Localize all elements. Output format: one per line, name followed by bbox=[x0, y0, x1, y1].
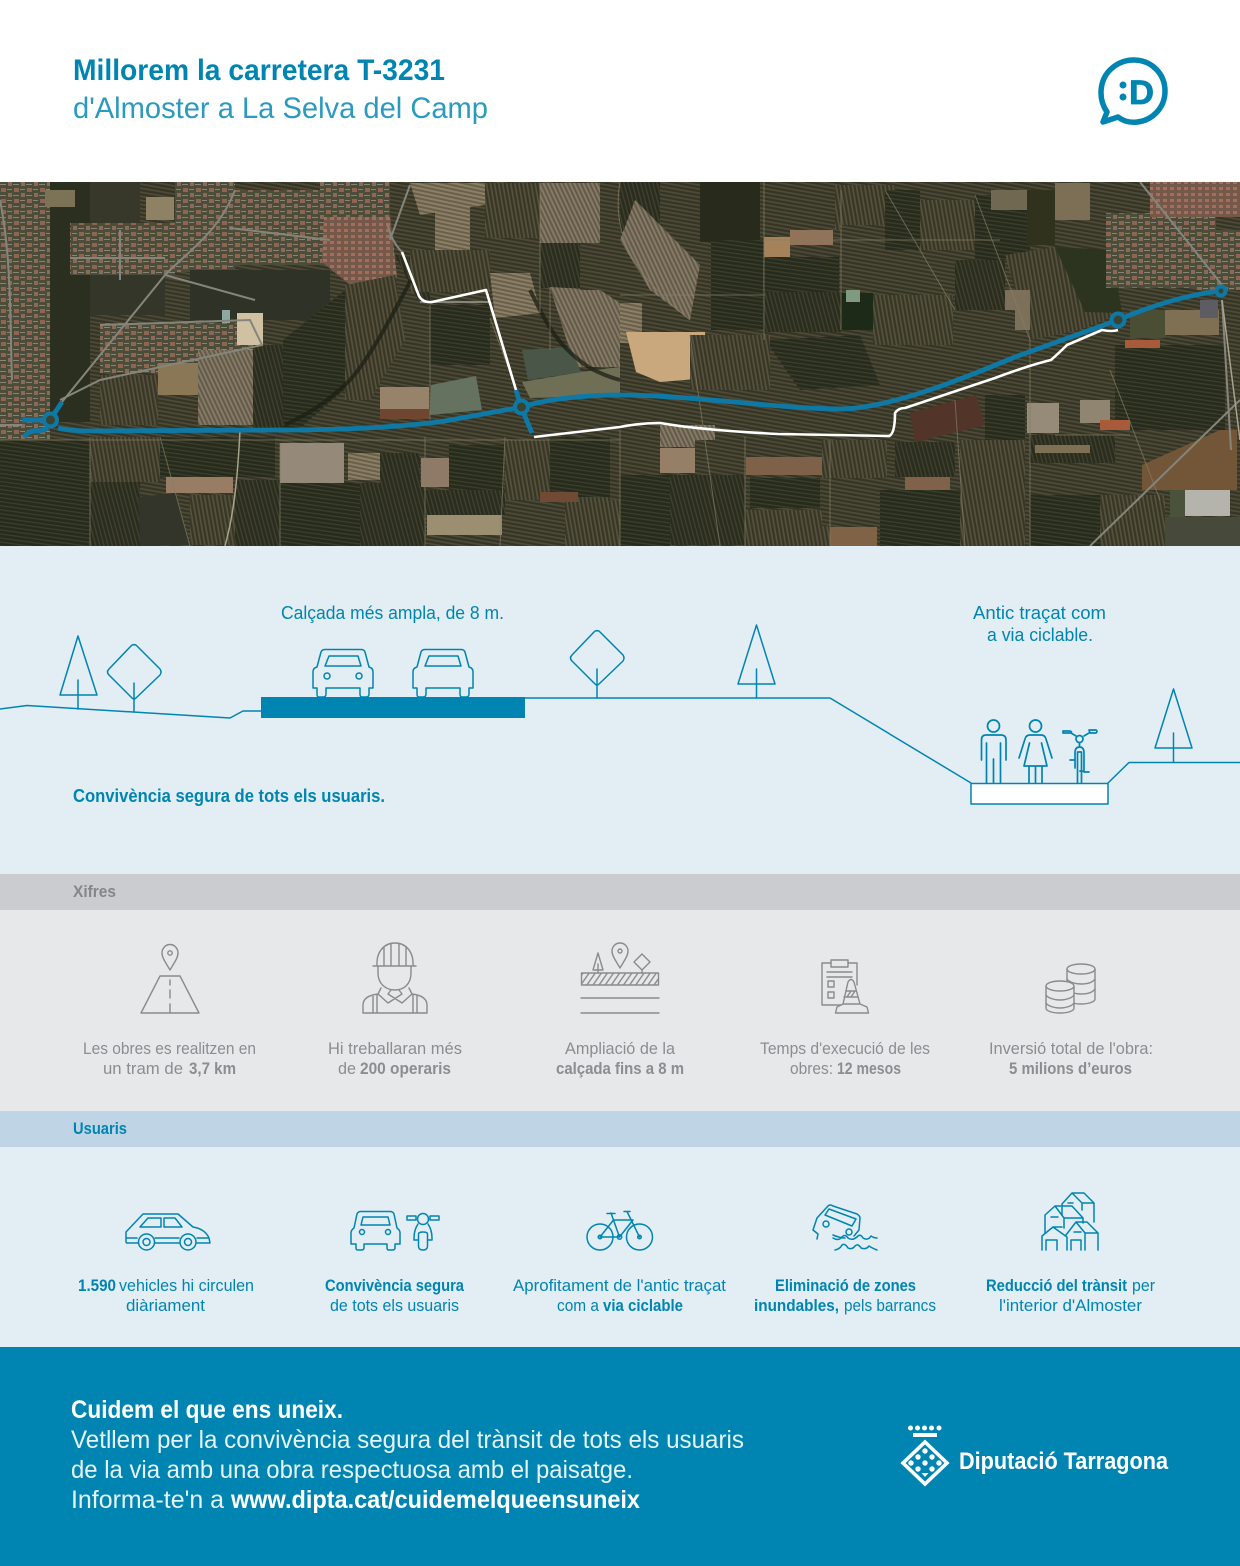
text: old route reuse: com a bbox=[557, 1297, 600, 1315]
text: traffic reduction: per bbox=[1132, 1277, 1155, 1295]
field tracks bbox=[0, 182, 1240, 546]
pedestrian woman bbox=[1019, 720, 1052, 783]
text: workers: de bbox=[338, 1060, 356, 1078]
logo: Diputació Tarragona bbox=[903, 1426, 1169, 1484]
text: vehicles: 1.590 bbox=[78, 1277, 116, 1295]
text: length of works: un tram de bbox=[103, 1060, 183, 1078]
heading band: Xifres: Xifres bbox=[73, 883, 116, 901]
text: flood zones: inundables, bbox=[754, 1297, 839, 1315]
label: old route: Antic traçat com bbox=[973, 603, 1106, 623]
logo: Diputació Tarragona: Diputació Tarragona bbox=[959, 1448, 1169, 1475]
icon: worker bbox=[363, 943, 427, 1013]
heading band: Xifres bbox=[0, 874, 1240, 910]
text: investment bbox=[989, 1040, 1153, 1078]
text: length of works: 3,7 km bbox=[189, 1060, 236, 1078]
text: flood zones: pels barrancs bbox=[844, 1297, 936, 1315]
old road in white bbox=[402, 252, 1118, 437]
icon: houses bbox=[1042, 1193, 1098, 1250]
text: widening bbox=[556, 1040, 684, 1078]
footer message: Informa-te'n a bbox=[71, 1486, 224, 1514]
text: duration: 12 mesos bbox=[837, 1060, 901, 1078]
new road in blue bbox=[22, 291, 1221, 437]
label: wider road: Calçada més ampla, de 8 m. bbox=[281, 603, 504, 623]
text: vehicles: diàriament bbox=[126, 1297, 205, 1315]
text: investment: 5 milions d’euros bbox=[1009, 1060, 1132, 1078]
text: vehicles: vehicles hi circulen bbox=[119, 1277, 254, 1295]
footer message bbox=[71, 1396, 744, 1514]
icon: speech bubble logo: D bbox=[1129, 74, 1154, 112]
panel: footer bbox=[0, 1347, 1240, 1566]
text: traffic reduction bbox=[986, 1277, 1155, 1315]
car rear bbox=[413, 650, 473, 697]
bicycle front view bbox=[1063, 730, 1097, 783]
text: traffic reduction: l'interior d'Almoster bbox=[999, 1297, 1143, 1315]
text: old route reuse: Aprofitament de l'antic traçat bbox=[513, 1277, 726, 1295]
title block bbox=[73, 54, 488, 125]
panel: users bbox=[0, 1147, 1240, 1347]
text: old route reuse: via ciclable bbox=[603, 1297, 683, 1315]
icon: road with pin bbox=[141, 944, 199, 1013]
aerial map with road route bbox=[0, 182, 1240, 546]
car bbox=[313, 650, 373, 697]
text: flood zones bbox=[754, 1277, 936, 1315]
icon: car side view bbox=[126, 1214, 210, 1250]
footer message: www.dipta.cat/cuidemelqueensuneix bbox=[230, 1486, 640, 1514]
text: traffic reduction: Reducció del trànsit bbox=[986, 1277, 1127, 1295]
text: safe coexistence bbox=[325, 1277, 465, 1315]
footer message: Vetllem per la convivència segura del trànsit de tots els usuaris bbox=[71, 1426, 744, 1454]
text: widening: calçada fins a 8 m bbox=[556, 1060, 684, 1078]
label: old route: a via ciclable. bbox=[987, 625, 1093, 645]
text: old route reuse bbox=[513, 1277, 726, 1315]
icon: road widening bbox=[581, 943, 659, 1013]
icon: bicycle bbox=[587, 1212, 652, 1250]
panel: figures bbox=[0, 910, 1240, 1111]
text: safe coexistence: de tots els usuaris bbox=[330, 1297, 459, 1315]
icon: clipboard and cone bbox=[822, 960, 868, 1013]
icon: coins bbox=[1046, 964, 1095, 1013]
heading band: Usuaris bbox=[0, 1111, 1240, 1147]
text: duration: Temps d'execució de les bbox=[760, 1040, 930, 1058]
trees bbox=[60, 625, 1192, 762]
panel: road cross-section bbox=[0, 546, 1240, 874]
icon: car in flood bbox=[813, 1205, 877, 1250]
text: length of works bbox=[83, 1040, 256, 1078]
text: workers: Hi treballaran més bbox=[328, 1040, 462, 1058]
text: duration bbox=[760, 1040, 930, 1078]
road surface bbox=[261, 697, 525, 718]
pedestrian man bbox=[982, 720, 1006, 783]
text: duration: obres: bbox=[790, 1060, 833, 1078]
heading band: Usuaris: Usuaris bbox=[73, 1120, 127, 1138]
text: length of works: Les obres es realitzen en bbox=[83, 1040, 256, 1058]
heading: Millorem la carretera T-3231 bbox=[73, 54, 445, 87]
subheading: d'Almoster a La Selva del Camp bbox=[73, 92, 488, 125]
footer message: Cuidem el que ens uneix. bbox=[71, 1396, 343, 1424]
text: vehicles bbox=[78, 1277, 254, 1315]
text: safe coexistence: Convivència segura bbox=[325, 1277, 465, 1295]
roundabouts bbox=[44, 286, 1226, 426]
ground profile bbox=[0, 698, 1240, 804]
text: investment: Inversió total de l'obra: bbox=[989, 1040, 1153, 1058]
text: workers: 200 operaris bbox=[360, 1060, 451, 1078]
label: old route bbox=[973, 603, 1106, 645]
text: flood zones: Eliminació de zones bbox=[775, 1277, 916, 1295]
callout: safe coexistence: Convivència segura de tots els usuaris. bbox=[73, 786, 385, 806]
icon: car and motorbike bbox=[351, 1212, 439, 1250]
text: widening: Ampliació de la bbox=[565, 1040, 676, 1058]
icon: speech bubble logo bbox=[1101, 60, 1165, 122]
footer message: de la via amb una obra respectuosa amb el paisatge. bbox=[71, 1456, 633, 1484]
text: workers bbox=[328, 1040, 462, 1078]
